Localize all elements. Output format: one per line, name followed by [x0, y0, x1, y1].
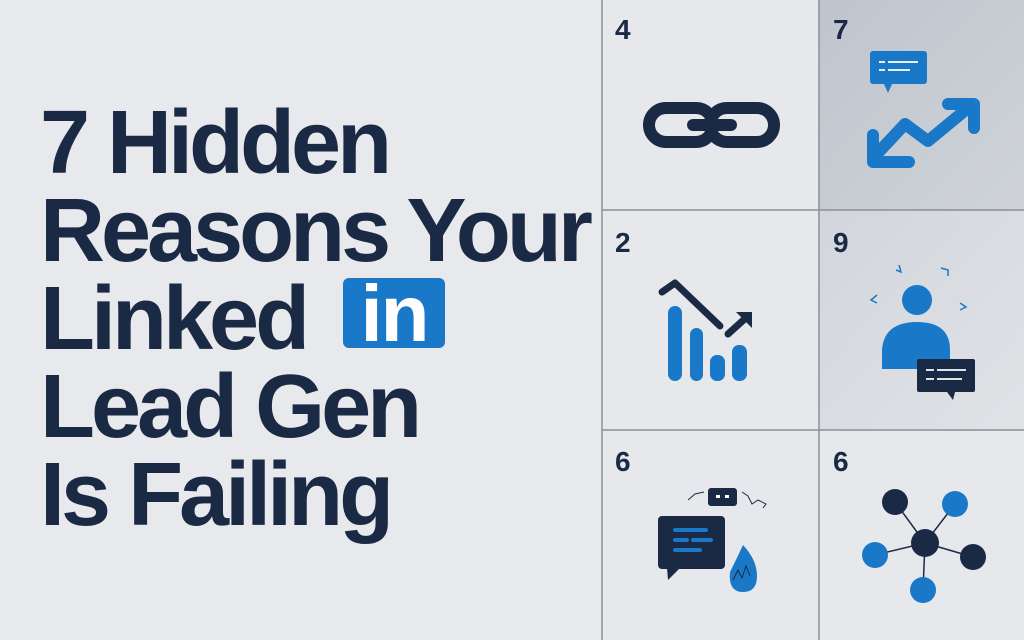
title: 7 Hidden — [40, 93, 388, 193]
linkedin logo — [343, 278, 445, 348]
cell numbers: 6 — [833, 446, 849, 477]
title: Lead Gen — [40, 357, 418, 457]
icon: chain link — [649, 108, 774, 142]
title — [40, 93, 592, 545]
cell numbers — [615, 14, 849, 477]
icon: bar chart with arrow — [662, 283, 752, 381]
cell numbers: 4 — [615, 14, 631, 45]
icon: chat with bot and flame — [658, 488, 766, 592]
icon: chat and zigzag arrow — [870, 51, 974, 162]
linkedin logo: in — [360, 269, 428, 358]
title: Is Failing — [40, 445, 390, 545]
cell numbers: 2 — [615, 227, 631, 258]
cell numbers: 7 — [833, 14, 849, 45]
icon: network nodes — [862, 489, 986, 603]
icon: person with chat — [871, 265, 975, 400]
title: Reasons Your — [40, 181, 589, 281]
title: Linked — [40, 269, 306, 369]
cell numbers: 6 — [615, 446, 631, 477]
cell numbers: 9 — [833, 227, 849, 258]
